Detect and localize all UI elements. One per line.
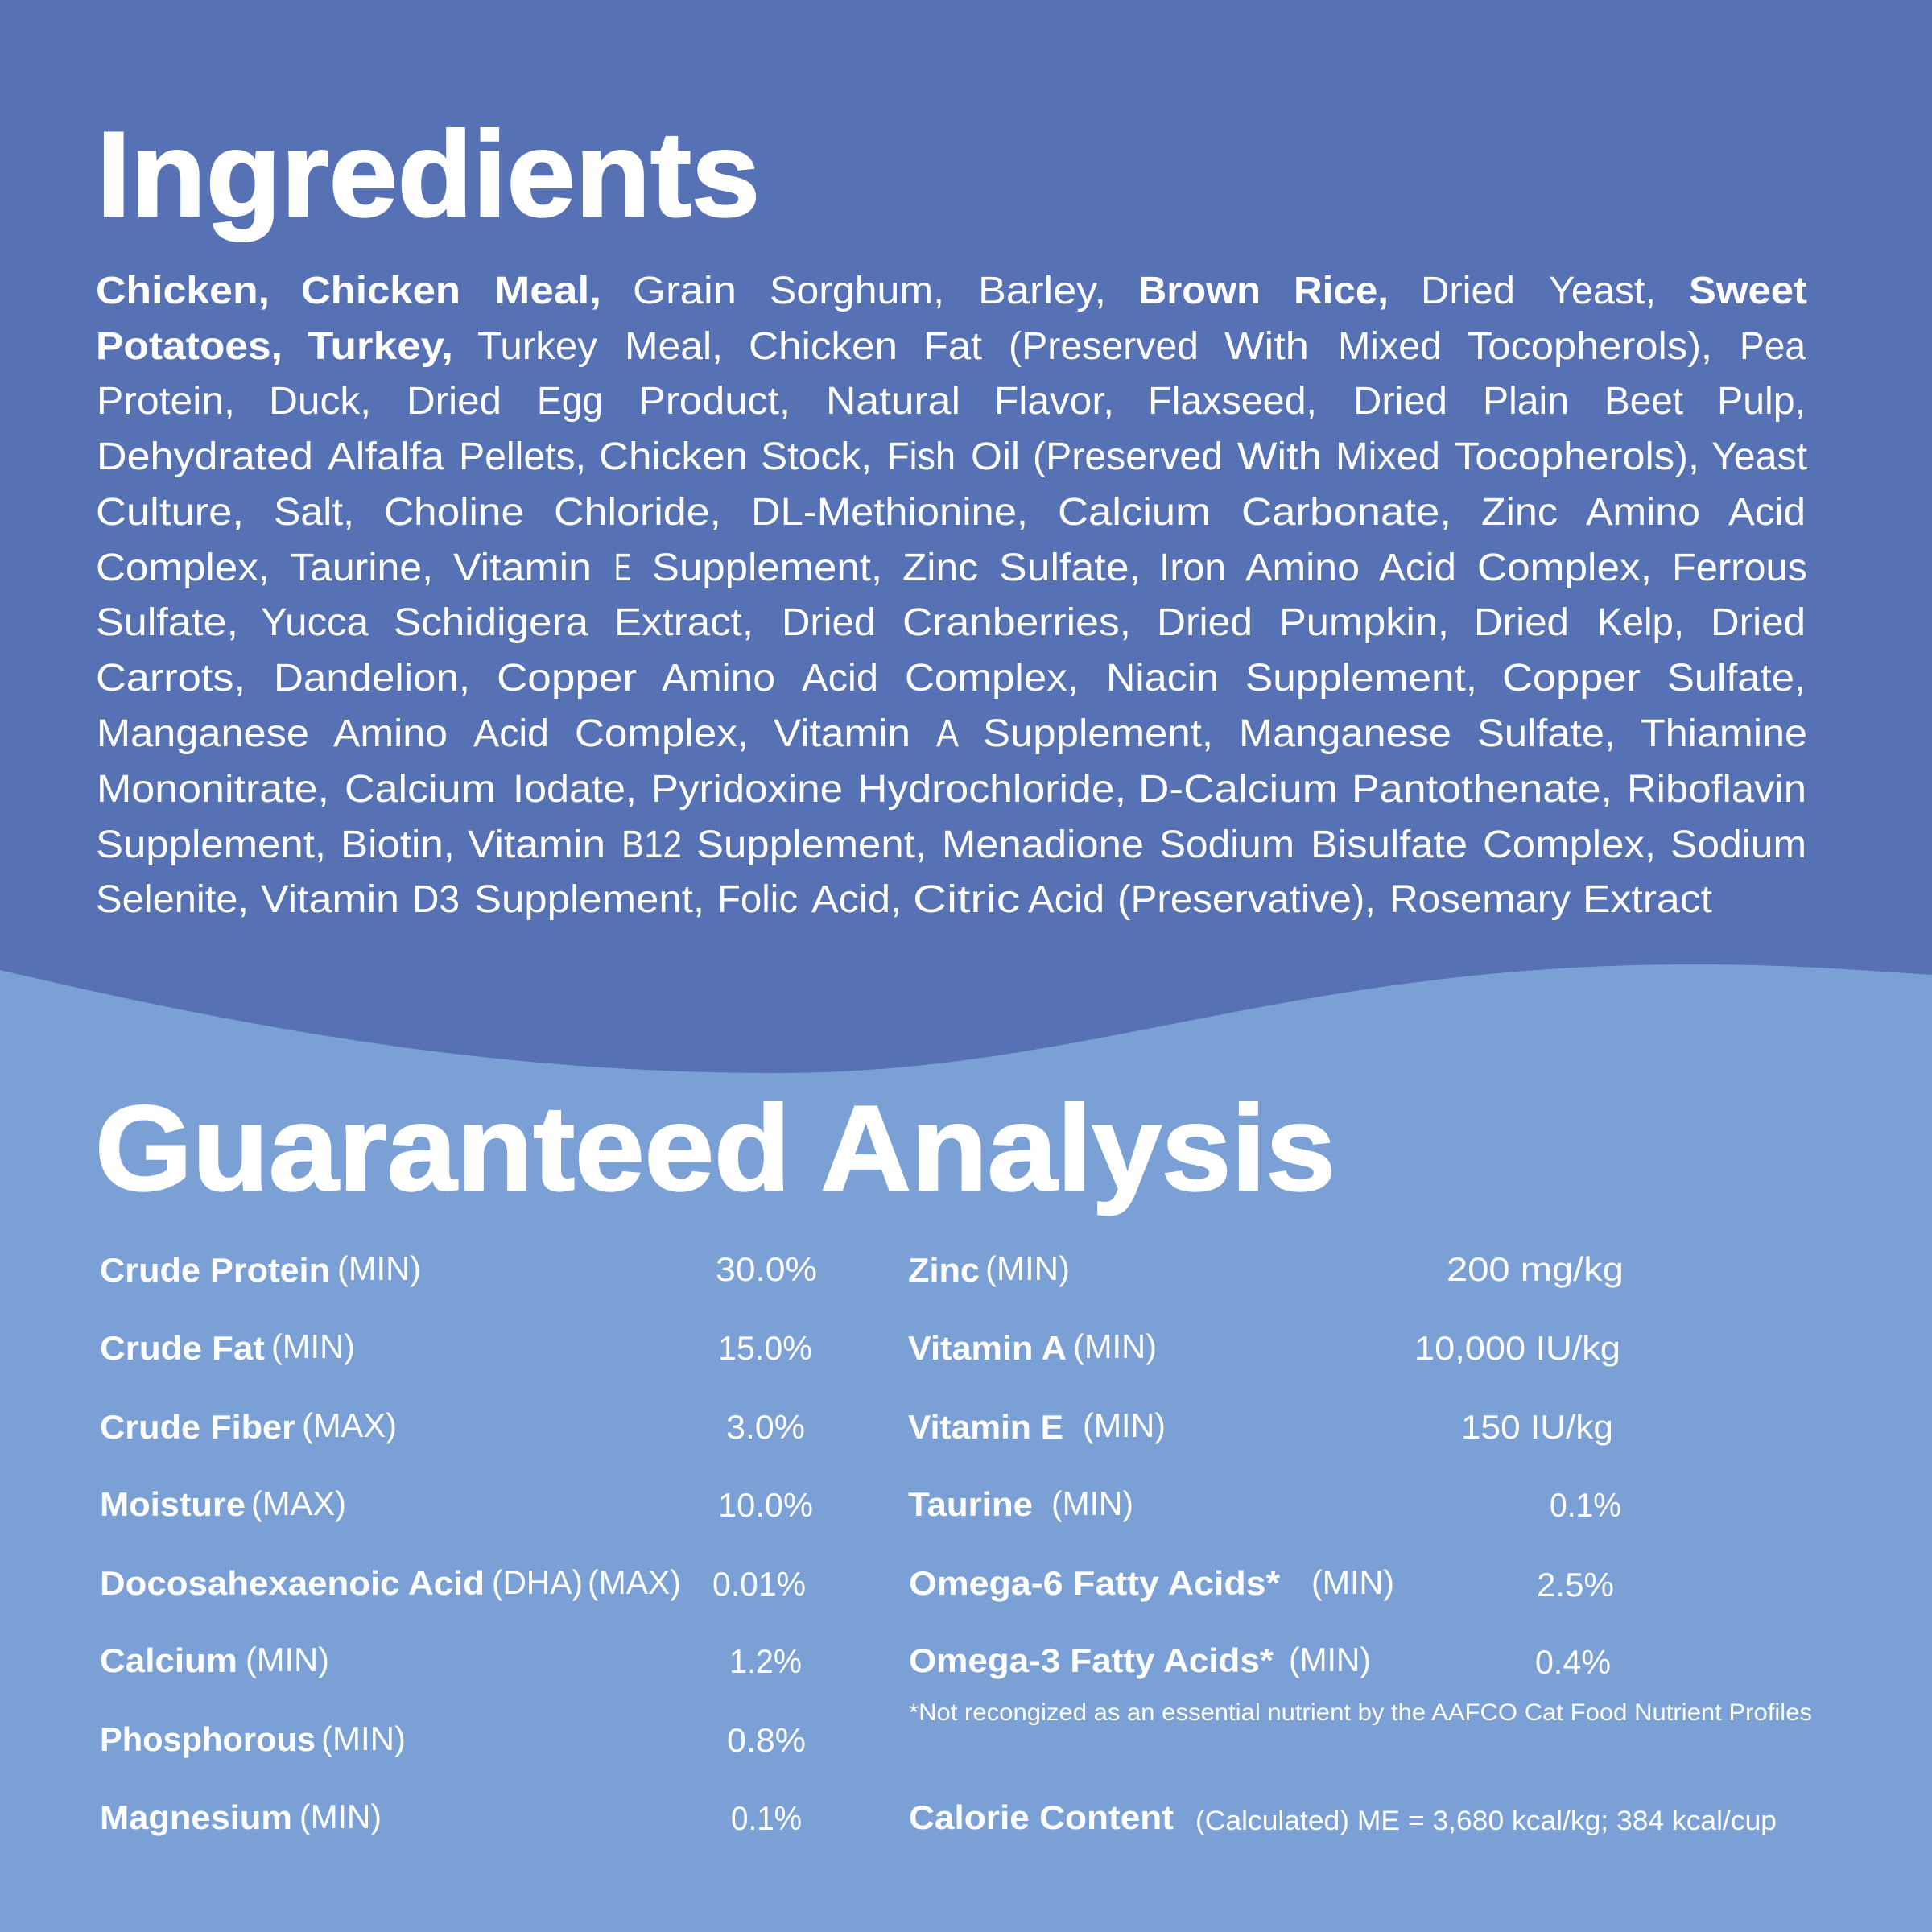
ingredients line 9	[97, 712, 1807, 755]
row: Vitamin A: (MIN)	[1073, 1327, 1157, 1365]
ingredients line 4: Stock,	[761, 436, 872, 478]
footnote: *Not recongized as an essential nutrient by the AAFCO Cat Food Nutrient Profiles	[909, 1699, 1812, 1726]
ingredients line 5: Chloride,	[554, 491, 721, 534]
row: Vitamin E: 150 IU/kg	[1461, 1408, 1613, 1446]
ingredients line 6: Supplement,	[652, 547, 882, 589]
ingredients line 7: Yucca	[261, 601, 369, 644]
ingredients line 12: Citric	[913, 878, 1020, 921]
ingredients line 2: Potatoes,	[96, 325, 283, 368]
ingredients line 2: Fat	[923, 325, 982, 368]
ingredients line 10: Riboflavin	[1627, 768, 1806, 811]
ingredients line 9: Vitamin	[774, 712, 910, 755]
ingredients line 4: Yeast	[1711, 436, 1807, 478]
ingredients line 10	[97, 768, 1806, 811]
ingredients line 9: Sulfate,	[1477, 712, 1616, 755]
ingredients line 11: Biotin,	[341, 824, 455, 866]
row: Crude Fiber: Crude Fiber	[100, 1408, 295, 1446]
row: Omega-6 Fatty Acids: Omega-6 Fatty Acids*	[909, 1564, 1281, 1602]
ingredients line 9: Thiamine	[1641, 712, 1807, 755]
ingredients line 1: Barley,	[978, 270, 1106, 312]
ingredients line 5	[96, 491, 1806, 534]
ingredients line 3: Duck,	[269, 380, 371, 423]
row: Omega-3 Fatty Acids	[909, 1641, 1611, 1681]
ingredients line 6: Taurine,	[290, 547, 433, 589]
ingredients line 5: DL-Methionine,	[751, 491, 1028, 534]
ingredients line 1: Brown	[1138, 270, 1261, 312]
ingredients line 1: Sweet	[1689, 270, 1807, 312]
ingredients line 8	[96, 657, 1806, 700]
ingredients line 9: Complex,	[575, 712, 749, 755]
ingredients line 4: Mixed	[1335, 436, 1440, 478]
row: Docosahexaenoic Acid: (MAX)	[588, 1563, 681, 1601]
ingredients line 9: Amino	[333, 712, 448, 755]
ingredients line 1: Rice,	[1294, 270, 1389, 312]
row: Vitamin A: 10,000 IU/kg	[1414, 1329, 1620, 1367]
ingredients line 12: (Preservative),	[1117, 878, 1376, 921]
ingredients line 12: D3	[412, 878, 460, 921]
ingredients line 2: Turkey	[477, 325, 597, 368]
ingredients line 2: Mixed	[1338, 325, 1442, 368]
ingredients line 8: Supplement,	[1245, 657, 1477, 700]
row: Calcium: (MIN)	[246, 1641, 329, 1678]
ingredients line 7: Kelp,	[1597, 601, 1684, 644]
ingredients line 9: Acid	[473, 712, 549, 755]
ingredients line 3	[97, 380, 1806, 423]
ingredients line 10: D-Calcium	[1138, 768, 1338, 811]
row: Crude Fiber: (MAX)	[302, 1406, 397, 1444]
row: Calorie Content: (Calculated) ME = 3,680 kcal/kg; 384 kcal/cup	[1195, 1806, 1777, 1836]
ingredients line 11: Vitamin	[468, 824, 605, 866]
row: Vitamin A: Vitamin A	[908, 1329, 1067, 1367]
ingredients line 4: With	[1237, 436, 1322, 478]
row: Omega-3 Fatty Acids: 0.4%	[1535, 1643, 1611, 1681]
ingredients line 6: Amino	[1245, 547, 1360, 589]
ingredients line 9: Manganese	[1239, 712, 1451, 755]
ingredients line 3: Beet	[1604, 380, 1683, 423]
ingredients line 1: Dried	[1421, 270, 1515, 312]
ingredients line 4: Pellets,	[459, 436, 586, 478]
row: Taurine	[908, 1484, 1621, 1524]
row: Crude Protein: Crude Protein	[100, 1251, 330, 1289]
ingredients line 5: Culture,	[96, 491, 244, 534]
analysis right column	[908, 1249, 1812, 1836]
row: Phosphorous: (MIN)	[321, 1719, 406, 1757]
ingredients line 12: Extract	[1583, 878, 1712, 921]
ingredients line 12: Acid,	[811, 878, 902, 921]
ingredients line 3: Protein,	[97, 380, 235, 423]
row: Docosahexaenoic Acid: Docosahexaenoic Acid	[100, 1564, 485, 1602]
ingredients line 6: Vitamin	[453, 547, 592, 589]
row: Crude Fat: 15.0%	[718, 1329, 812, 1367]
ingredients line 12: Rosemary	[1389, 878, 1571, 921]
ingredients line 7: Extract,	[614, 601, 753, 644]
title: Ingredients: Ingredients	[97, 106, 760, 242]
row: Crude Fiber	[100, 1406, 805, 1446]
row: Moisture: Moisture	[100, 1485, 246, 1523]
row: Crude Fat: (MIN)	[271, 1327, 355, 1365]
ingredients line 6: Zinc	[902, 547, 978, 589]
ingredients line 4: Fish	[887, 436, 956, 478]
ingredients line 5: Calcium	[1058, 491, 1211, 534]
row: Moisture: (MAX)	[251, 1484, 346, 1522]
ingredients line 5: Choline	[384, 491, 524, 534]
wave background	[0, 964, 1932, 1932]
row: Taurine: Taurine	[908, 1485, 1033, 1523]
row: Phosphorous: 0.8%	[727, 1721, 806, 1759]
row: Vitamin E	[908, 1406, 1613, 1446]
ingredients line 5: Acid	[1728, 491, 1806, 534]
row: Calcium	[100, 1641, 802, 1680]
ingredients line 6: Complex,	[1477, 547, 1652, 589]
row: Omega-6 Fatty Acids	[909, 1563, 1614, 1604]
ingredients line 8: Copper	[497, 657, 637, 700]
ingredients line 7	[96, 601, 1806, 644]
ingredients line 8: Copper	[1502, 657, 1641, 700]
ingredients line 11: Sodium	[1159, 824, 1294, 866]
ingredients line 3: Natural	[826, 380, 960, 423]
ingredients line 1: Yeast,	[1549, 270, 1656, 312]
ingredients line 8: Amino	[662, 657, 775, 700]
ingredients line 12: Folic	[717, 878, 798, 921]
ingredients line 8: Niacin	[1106, 657, 1219, 700]
ingredients line 3: Egg	[537, 380, 603, 423]
ingredients line 4: Oil	[971, 436, 1020, 478]
row: Magnesium	[100, 1798, 802, 1837]
analysis left column	[100, 1249, 817, 1837]
ingredients line 2: With	[1224, 325, 1309, 368]
ingredients line 12: Supplement,	[474, 878, 704, 921]
ingredients line 3: Product,	[638, 380, 791, 423]
ingredients line 10: Hydrochloride,	[857, 768, 1126, 811]
ingredients line 12: Vitamin	[261, 878, 399, 921]
ingredients line 3: Dried	[407, 380, 502, 423]
ingredients line 11: Bisulfate	[1311, 824, 1468, 866]
row: Calorie Content: Calorie Content	[909, 1798, 1174, 1836]
ingredients line 11: B12	[621, 824, 682, 866]
ingredients line 11	[96, 824, 1806, 866]
ingredients line 2: (Preserved	[1009, 325, 1199, 368]
ingredients line 5: Carbonate,	[1241, 491, 1451, 534]
ingredients line 3: Plain	[1483, 380, 1569, 423]
ingredients line 11: Complex,	[1483, 824, 1656, 866]
row: Calcium: 1.2%	[729, 1642, 802, 1680]
row: Docosahexaenoic Acid: 0.01%	[712, 1565, 806, 1603]
ingredients line 5: Amino	[1586, 491, 1700, 534]
row: Crude Protein: 30.0%	[716, 1250, 817, 1288]
ingredients line 6: Sulfate,	[999, 547, 1141, 589]
ingredients line 7: Cranberries,	[902, 601, 1131, 644]
ingredients line 10: Pantothenate,	[1352, 768, 1612, 811]
row: Zinc: Zinc	[908, 1251, 980, 1289]
row: Magnesium: 0.1%	[731, 1799, 802, 1837]
ingredients line 6: Acid	[1379, 547, 1456, 589]
ingredients line 1: Chicken	[301, 270, 460, 312]
ingredients line 5: Salt,	[274, 491, 354, 534]
row: Crude Fiber: 3.0%	[726, 1408, 805, 1446]
ingredients line 4: (Preserved	[1033, 436, 1223, 478]
row: Phosphorous: Phosphorous	[100, 1720, 316, 1758]
row: Omega-6 Fatty Acids: 2.5%	[1537, 1566, 1614, 1604]
ingredients line 11: Menadione	[942, 824, 1144, 866]
ingredients line 7: Sulfate,	[96, 601, 238, 644]
ingredients line 6: Iron	[1159, 547, 1226, 589]
row: Docosahexaenoic Acid: (DHA)	[492, 1563, 583, 1601]
ingredients line 6: Ferrous	[1672, 547, 1807, 589]
ingredients line 2: Pea	[1740, 325, 1806, 368]
ingredients line 12: Selenite,	[96, 878, 249, 921]
row: Phosphorous	[100, 1719, 806, 1759]
row: Taurine: 0.1%	[1550, 1486, 1621, 1524]
row: Omega-3 Fatty Acids: Omega-3 Fatty Acids*	[909, 1641, 1274, 1679]
ingredients line 8: Dandelion,	[274, 657, 470, 700]
row: Vitamin E: (MIN)	[1083, 1406, 1166, 1444]
ingredients line 6: Complex,	[96, 547, 270, 589]
ingredients line 7: Schidigera	[394, 601, 588, 644]
row: Magnesium: Magnesium	[100, 1798, 292, 1836]
ingredients line 3: Flaxseed,	[1148, 380, 1317, 423]
ingredients line 8: Carrots,	[96, 657, 246, 700]
ingredients line 4: Tocopherols),	[1455, 436, 1699, 478]
row: Taurine: (MIN)	[1051, 1484, 1133, 1522]
row: Zinc	[908, 1249, 1624, 1289]
title: Guaranteed Analysis: Guaranteed Analysis	[95, 1080, 1335, 1216]
ingredients line 4: Alfalfa	[328, 436, 444, 478]
ingredients line 2	[96, 325, 1806, 368]
row: Omega-3 Fatty Acids: (MIN)	[1289, 1641, 1371, 1678]
row: Omega-6 Fatty Acids: (MIN)	[1311, 1563, 1394, 1601]
ingredients line 6: E	[614, 547, 631, 589]
ingredients line 8: Complex,	[905, 657, 1079, 700]
ingredients line 7: Dried	[1711, 601, 1806, 644]
ingredients line 1: Sorghum,	[770, 270, 944, 312]
ingredients line 4	[97, 436, 1807, 478]
row: Magnesium: (MIN)	[299, 1798, 382, 1835]
ingredients line 7: Dried	[1474, 601, 1569, 644]
ingredients line 10: Calcium	[345, 768, 496, 811]
ingredients line 9: Manganese	[97, 712, 309, 755]
ingredients line 7: Dried	[1157, 601, 1253, 644]
ingredients line 11: Supplement,	[96, 824, 326, 866]
row: Zinc: (MIN)	[985, 1249, 1070, 1287]
ingredients line 10: Pyridoxine	[651, 768, 843, 811]
ingredients line 1: Grain	[633, 270, 737, 312]
ingredients line 3: Flavor,	[994, 380, 1114, 423]
ingredients line 3: Pulp,	[1717, 380, 1806, 423]
ingredients line 1: Chicken,	[96, 270, 270, 312]
ingredients line 4: Dehydrated	[97, 436, 313, 478]
ingredients line 2: Turkey,	[308, 325, 453, 368]
ingredients line 1: Meal,	[494, 270, 601, 312]
ingredients line 12	[96, 878, 1712, 921]
ingredients line 9: Supplement,	[983, 712, 1213, 755]
ingredients line 7: Pumpkin,	[1279, 601, 1449, 644]
row: Crude Protein: (MIN)	[337, 1249, 421, 1287]
ingredients line 5: Zinc	[1481, 491, 1558, 534]
row: Moisture	[100, 1484, 813, 1524]
ingredients list	[96, 270, 1807, 921]
row: Calorie Content	[909, 1798, 1777, 1836]
ingredients line 3: Dried	[1353, 380, 1447, 423]
ingredients line 2: Meal,	[625, 325, 723, 368]
ingredients line 7: Dried	[782, 601, 876, 644]
row: Zinc: 200 mg/kg	[1447, 1250, 1624, 1288]
ingredients line 12: Acid	[1028, 878, 1104, 921]
ingredients line 2: Chicken	[749, 325, 898, 368]
row: Moisture: 10.0%	[718, 1486, 813, 1524]
ingredients line 4: Chicken	[599, 436, 748, 478]
row: Calcium: Calcium	[100, 1641, 237, 1679]
row: Crude Protein	[100, 1249, 817, 1289]
ingredients line 8: Acid	[802, 657, 878, 700]
row: Docosahexaenoic Acid	[100, 1563, 806, 1603]
ingredients line 11: Sodium	[1670, 824, 1806, 866]
row: Vitamin A	[908, 1327, 1620, 1367]
ingredients line 10: Mononitrate,	[97, 768, 329, 811]
ingredients line 9: A	[936, 712, 959, 755]
ingredients line 11: Supplement,	[696, 824, 927, 866]
ingredients line 6	[96, 547, 1807, 589]
ingredients line 10: Iodate,	[513, 768, 637, 811]
ingredients line 1	[96, 270, 1807, 312]
ingredients line 8: Sulfate,	[1667, 657, 1806, 700]
row: Crude Fat	[100, 1327, 812, 1367]
row: Crude Fat: Crude Fat	[100, 1329, 265, 1367]
row: Vitamin E: Vitamin E	[908, 1408, 1063, 1446]
ingredients line 2: Tocopherols),	[1468, 325, 1712, 368]
